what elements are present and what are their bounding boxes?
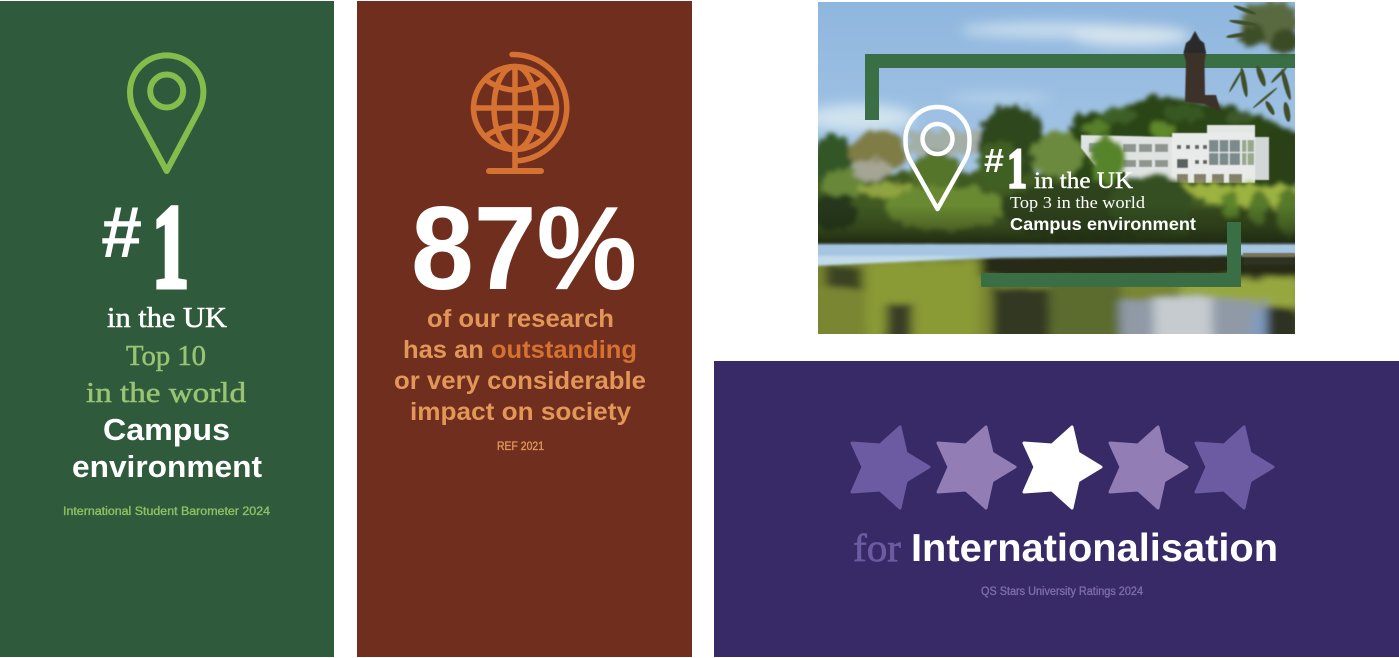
source: REF 2021: REF 2021 [497, 441, 544, 453]
heading: internationalisation: Internationalisation [911, 527, 1278, 570]
jetty [1243, 253, 1295, 265]
tower: monument [1184, 31, 1221, 112]
bracket: bottom right [981, 222, 1241, 287]
foliage: willow branches [1226, 0, 1299, 122]
stars: five star rating [852, 427, 1273, 508]
trees and hill [810, 97, 1300, 247]
text: has an outstanding: has an outstanding [403, 336, 637, 364]
text: in the world: in the world [86, 378, 246, 409]
rank: photo #1: 1 [1007, 138, 1027, 200]
text: impact on society: impact on society [410, 398, 631, 426]
icon: white pin [906, 107, 970, 209]
text: campus: Campus [103, 412, 230, 447]
stat: 87%: 87% [411, 182, 637, 315]
rank: #1: # [100, 193, 141, 273]
source: barometer: International Student Barometer 2024 [63, 506, 271, 518]
panel: research impact [357, 1, 692, 657]
rank: photo #1: # [984, 142, 1004, 179]
rank: #1: 1 [152, 180, 189, 313]
rank: #1 [100, 180, 189, 313]
panel: campus environment [0, 1, 334, 657]
panel: internationalisation [714, 361, 1399, 657]
bracket: top left [865, 54, 1295, 120]
text: of our research: of our research [427, 305, 614, 333]
icon: location pin [130, 55, 203, 171]
text: photo campus environment: Campus environment [1010, 214, 1196, 234]
text: photo top 3: Top 3 in the world [1010, 193, 1146, 212]
source: QS stars: QS Stars University Ratings 2024 [981, 586, 1144, 598]
lawn and foreground trees [1091, 136, 1300, 242]
icon: globe [474, 54, 567, 171]
text: top 10: Top 10 [126, 341, 206, 372]
building: campus block [1081, 125, 1269, 183]
water strip [810, 244, 1300, 266]
photo: loch and hillside [818, 2, 1295, 334]
reflection in water [818, 254, 1295, 334]
rank: photo #1 [984, 148, 1026, 189]
heading: for: for [853, 527, 901, 570]
panel: campus photo [818, 2, 1295, 334]
text: photo in the UK: in the UK [1034, 168, 1133, 193]
text: environment: environment [72, 449, 262, 484]
text: or very considerable: or very considerable [394, 367, 646, 395]
text: in the UK: in the UK [107, 303, 227, 334]
